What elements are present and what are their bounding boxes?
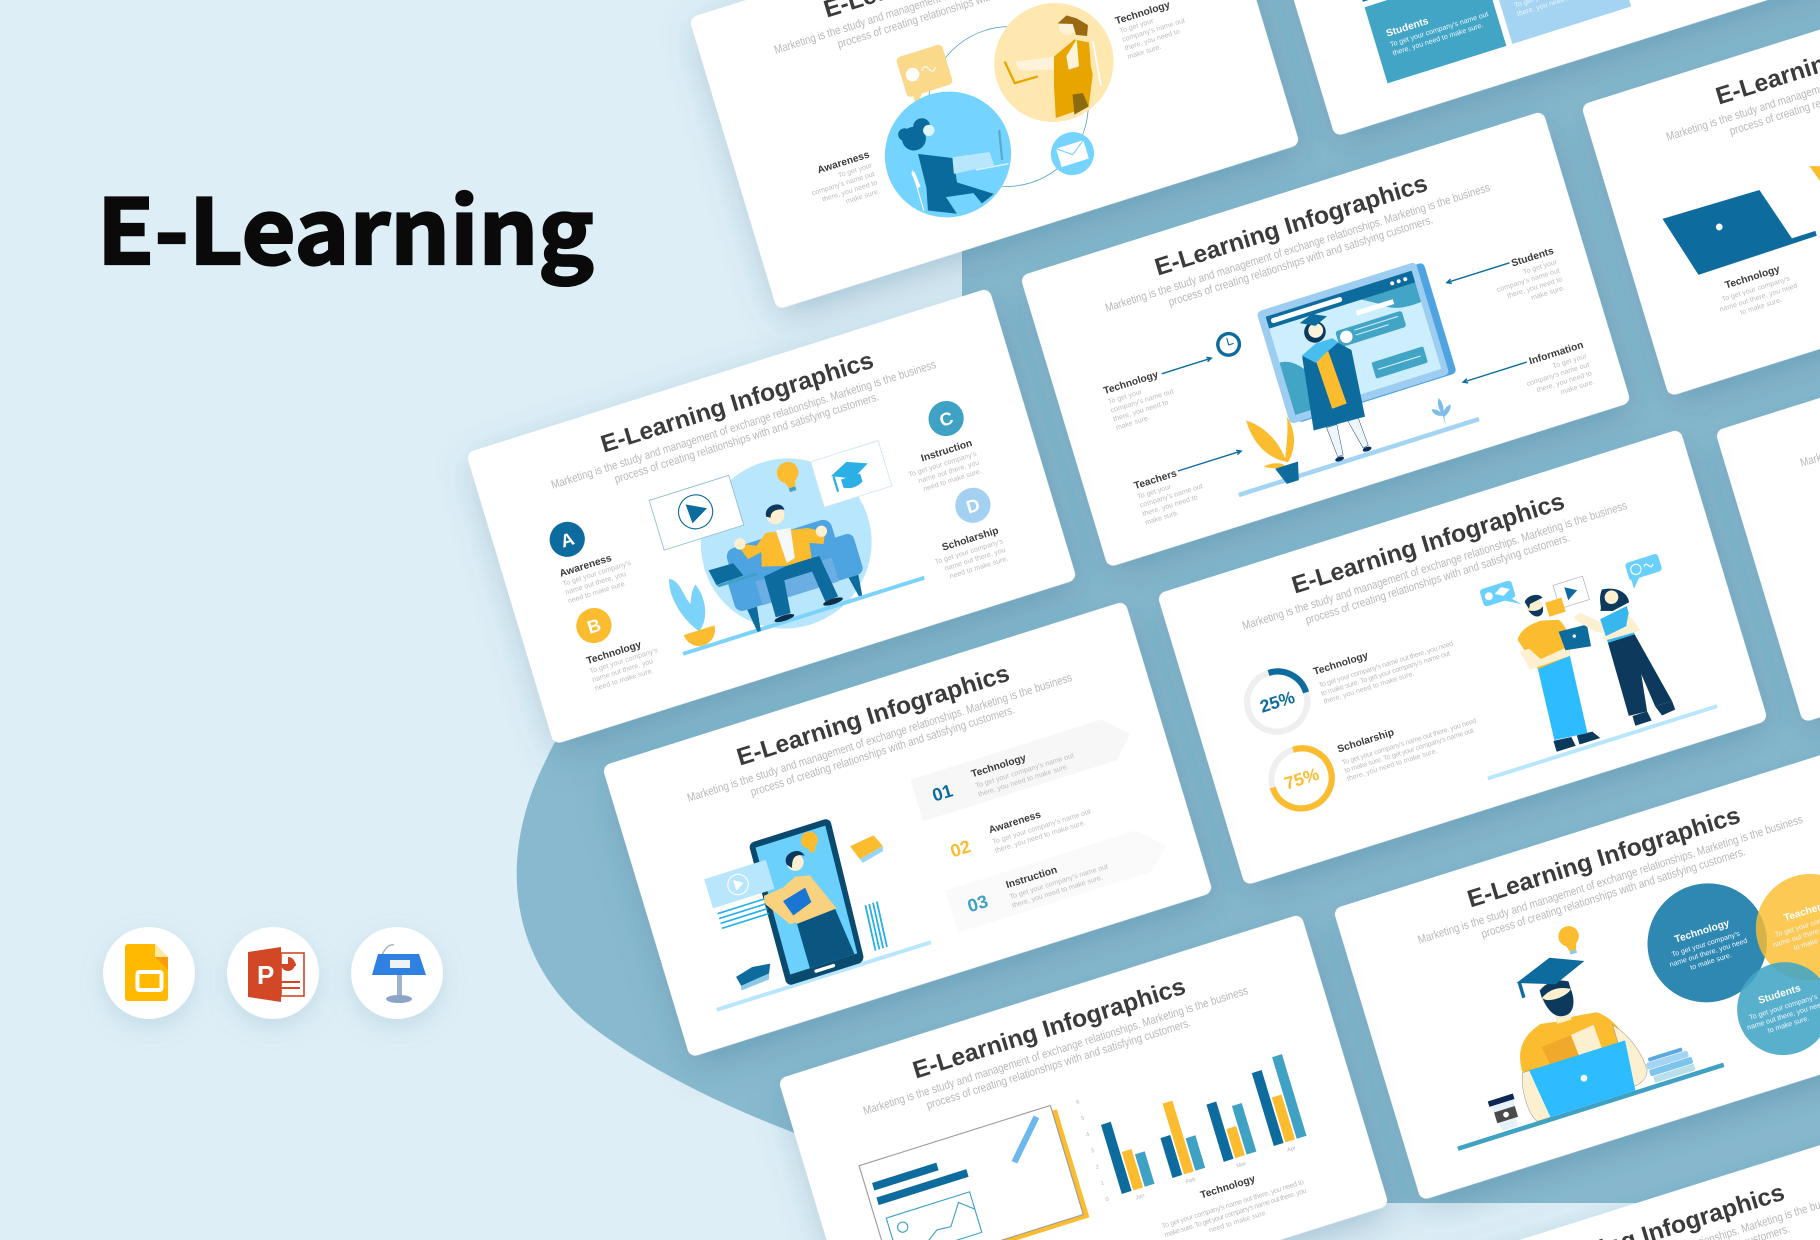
step 02: 02 — [948, 836, 973, 861]
graduate woman — [1281, 306, 1381, 466]
label: information — [1519, 340, 1596, 405]
video box — [649, 475, 744, 550]
axis labels: 3 — [1090, 1148, 1095, 1155]
slide subtitle: process of creating relationships with and satisfying customers. — [925, 1015, 1192, 1112]
video box — [1553, 576, 1589, 609]
label: students: company's name out — [1496, 267, 1561, 294]
label: technology: make sure. — [1115, 414, 1151, 432]
slide subtitle — [685, 670, 1078, 818]
step 01: Technology — [970, 753, 1028, 780]
label: technology: need to make sure. — [1208, 1208, 1268, 1234]
axis labels: Mar — [1236, 1161, 1247, 1170]
axis labels: Jan — [1135, 1193, 1145, 1202]
badge A: awareness: A — [558, 529, 577, 552]
arrow panel 1 — [910, 712, 1137, 821]
badge A: awareness: need to make sure. — [567, 579, 627, 605]
label: students: there, you need to — [1506, 275, 1563, 300]
donut: 25%: 25% — [1257, 687, 1297, 717]
technology text: name out there, you need — [1669, 937, 1748, 969]
bars: january — [1101, 1115, 1155, 1194]
label: scholarship — [1336, 702, 1482, 783]
label: technology: company's name out — [1121, 16, 1186, 44]
slide: study — [1333, 744, 1820, 1201]
label: teachers: company's name out — [1139, 482, 1204, 510]
students text: To get your company's — [1748, 993, 1819, 1022]
man with beard — [1505, 588, 1600, 754]
students text: Students — [1757, 983, 1802, 1007]
arrow: students — [1446, 261, 1510, 285]
bars: february — [1151, 1097, 1205, 1178]
students text — [1739, 977, 1820, 1041]
label: technology — [1712, 260, 1801, 322]
slide subtitle: process of creating relationships with and satisfying customers. — [613, 389, 880, 486]
background blob — [517, 0, 1820, 1203]
label: students: To get your — [1522, 258, 1559, 276]
slide subtitle — [1103, 180, 1496, 328]
badge C: instruction: name out there, you — [917, 458, 980, 485]
label: scholarship: to make sure. To get your company's name out — [1344, 727, 1474, 775]
axis labels: Apr — [1286, 1145, 1297, 1154]
video card — [704, 860, 775, 908]
label: awareness: there, you need to — [821, 179, 878, 204]
step 01: there, you need to make sure. — [977, 762, 1070, 799]
label: teachers: make sure. — [1144, 509, 1180, 527]
slide: bottom right — [1377, 1120, 1820, 1240]
icon: clock — [1215, 331, 1242, 358]
label: awareness: To get your — [837, 161, 874, 180]
step 01 — [929, 739, 1077, 812]
slide: far right — [1715, 266, 1820, 723]
students block — [1365, 0, 1506, 83]
slide subtitle: process of creating relationships with and satisfying customers. — [1167, 212, 1434, 309]
icon: bulb — [799, 829, 821, 855]
text lines — [717, 898, 769, 929]
label: scholarship: Scholarship — [1336, 727, 1395, 755]
label: technology: To get your — [1107, 388, 1144, 406]
label: students: make sure. — [1530, 284, 1566, 302]
arrow panel 3 — [945, 823, 1173, 933]
technology text: Technology — [1673, 918, 1731, 946]
bar chart — [1076, 1037, 1310, 1210]
badge C: instruction: C — [937, 408, 956, 431]
technology text: to make sure. — [1689, 951, 1733, 972]
badge B: technology: name out there, you — [591, 657, 654, 684]
label: technology: make sure. — [1126, 43, 1162, 61]
slide heading: E-Learning Infographics — [734, 660, 1013, 771]
badge B: technology: need to make sure. — [594, 667, 654, 693]
axis labels: 2 — [1095, 1164, 1100, 1171]
woman with long hair — [1568, 579, 1676, 734]
vertical lines — [862, 902, 890, 951]
badge D: scholarship: need to make sure. — [949, 555, 1009, 581]
arrow: teachers — [1177, 449, 1242, 473]
badge B: technology: B — [585, 615, 603, 638]
label: technology: make sure. To get your company's name out there, you — [1164, 1187, 1308, 1239]
label: students: Students — [1510, 246, 1556, 269]
tablet — [1559, 623, 1593, 654]
slide subtitle: Marketing is the study and management of exchange relationships. Marketing is the business — [1240, 498, 1629, 633]
step 03 — [964, 850, 1112, 923]
label: technology: Technology — [1199, 1174, 1257, 1201]
label: technology: there, you need to — [1112, 398, 1169, 423]
badge D: scholarship: D — [964, 495, 982, 518]
badge C: instruction: need to make sure. — [922, 467, 983, 493]
badge D: scholarship: To get your company's — [934, 537, 1004, 566]
bars: march — [1206, 1094, 1256, 1162]
step 03: there, you need to make sure. — [1011, 874, 1104, 910]
app icons — [103, 927, 443, 1019]
label: scholarship: To get your company's name out there, you need — [1341, 717, 1477, 767]
floor line — [1238, 417, 1480, 497]
label: information: company's name out — [1526, 361, 1590, 388]
label: technology — [1102, 367, 1180, 432]
axis labels — [1076, 1041, 1297, 1210]
label: awareness: Awareness — [816, 149, 871, 176]
blue book — [735, 961, 775, 991]
technology text — [1662, 914, 1751, 977]
axis labels: 1 — [1100, 1180, 1105, 1187]
slide: phone — [602, 601, 1213, 1058]
bars: april — [1249, 1054, 1307, 1146]
slide subtitle — [1460, 1189, 1820, 1240]
label: technology: to make sure. — [1739, 296, 1783, 317]
slide subtitle — [1240, 498, 1633, 646]
slide subtitle: process of creating relationships with and satisfying customers. — [749, 702, 1016, 799]
slide subtitle: process of creating relationships with and satisfying customers. — [1304, 530, 1571, 627]
step 02: Awareness — [988, 809, 1043, 836]
axis labels: 5 — [1081, 1116, 1085, 1122]
badge B: technology: To get your company's — [589, 646, 659, 675]
students block: Students — [1385, 16, 1430, 40]
arrow: technology — [1161, 356, 1212, 376]
plant in pot — [1246, 408, 1307, 490]
students block: To get your company's name out — [1389, 10, 1489, 49]
label: technology: To get your — [1119, 17, 1155, 35]
coffee cup — [1488, 1094, 1522, 1133]
envelope circle — [1046, 127, 1099, 181]
speech bubble: graduation — [1479, 579, 1522, 615]
label: awareness: company's name out — [811, 170, 876, 197]
slide: laptop — [1581, 0, 1820, 397]
slide subtitle — [772, 0, 1165, 70]
backdrop circle — [680, 437, 892, 650]
slide: chart — [778, 914, 1389, 1240]
teachers text — [1765, 895, 1820, 958]
icon: bulb — [1556, 924, 1584, 957]
label: information: there, you need to — [1536, 369, 1593, 394]
arrow: information — [1463, 360, 1528, 384]
sofa — [719, 512, 871, 636]
light block — [1489, 0, 1631, 44]
label: technology: Technology — [1114, 0, 1172, 27]
students block: there, you need to make sure. — [1392, 21, 1484, 57]
step 02: there, you need to make sure. — [994, 819, 1087, 855]
label: teachers: there, you need to — [1142, 493, 1199, 518]
seated man — [727, 492, 848, 629]
label: awareness — [805, 149, 882, 215]
floor line — [1487, 704, 1718, 780]
badge C: instruction — [891, 396, 983, 496]
floor line — [1457, 1063, 1724, 1151]
label: technology: To get your company's — [1721, 274, 1791, 304]
dark block — [1340, 0, 1482, 2]
slide heading: E-Learning Infographics — [1289, 488, 1568, 599]
yellow shape — [1809, 163, 1820, 183]
slide subtitle: Marketing is the study and management of exchange relationships. Marketing is the business — [549, 357, 938, 492]
slide heading: E-Learning Infographics — [1152, 170, 1431, 281]
label: information: To get your — [1552, 352, 1588, 370]
slide subtitle: Marketing is the study and management of exchange relationships. Marketing is the business — [861, 983, 1250, 1118]
label: technology — [1114, 0, 1191, 61]
step 02 — [947, 795, 1094, 868]
slide subtitle: Marketing is the study and management of exchange relationships. Marketing is the business — [685, 670, 1074, 805]
label: technology: Technology — [1312, 650, 1370, 678]
label: technology: To get your company's name out there, you need to — [1161, 1178, 1305, 1230]
students text: to make sure. — [1767, 1014, 1810, 1035]
label: students — [1490, 246, 1566, 311]
label: information: make sure. — [1560, 378, 1596, 396]
badge D: scholarship: name out there, you — [944, 546, 1007, 573]
icon: powerpoint: P — [257, 960, 274, 990]
axis labels: Feb — [1185, 1177, 1196, 1186]
slide heading: E-Learning Infographics — [910, 973, 1189, 1084]
label: scholarship: there, you need to make sure. — [1346, 747, 1439, 783]
blue circle with woman at laptop — [869, 75, 1027, 234]
browser window — [1256, 260, 1457, 425]
step 02: To get your company's name out — [991, 808, 1092, 846]
badge B: technology: Technology — [585, 639, 643, 667]
icon: powerpoint — [227, 927, 319, 1019]
slide subtitle: Marketing is the study and management of exchange relationships. Marketing is the business — [1103, 180, 1492, 315]
step 03: To get your company's name out — [1009, 862, 1109, 901]
potted plant — [667, 570, 719, 650]
badge A: awareness: To get your company's — [562, 559, 632, 588]
badge B: technology — [572, 592, 664, 693]
label: technology: company's name out — [1110, 387, 1174, 415]
slide: sofa — [466, 288, 1077, 745]
icon: keynote — [351, 927, 443, 1019]
slide heading: E-Learning Infographics — [1464, 802, 1743, 913]
pen — [1004, 1117, 1047, 1162]
phone — [744, 818, 872, 986]
student with cap — [1488, 939, 1652, 1123]
slide: colored blocks — [1247, 0, 1820, 137]
icon: bulb — [774, 459, 804, 494]
orange square — [1545, 598, 1566, 617]
axis labels: 0 — [1105, 1197, 1110, 1203]
laptop illustration — [1663, 176, 1817, 280]
slide subtitle: process of creating relationships with and satisfying customers. — [1479, 844, 1747, 941]
donut: 75% — [1264, 741, 1339, 816]
badge D: scholarship — [918, 483, 1010, 584]
slide heading: E-Learning Infographics — [598, 347, 877, 458]
yellow book — [849, 834, 886, 865]
step 01: To get your company's name out — [975, 751, 1075, 790]
badge C: instruction: Instruction — [920, 438, 974, 464]
small sprout — [1429, 395, 1456, 428]
label: technology: there, you need to — [1124, 28, 1181, 52]
laptop — [1529, 1040, 1640, 1119]
donut: 25% — [1240, 664, 1315, 739]
slide: women and circles — [689, 0, 1300, 310]
label: technology: To get your company's name out there, you need — [1318, 640, 1454, 690]
slide subtitle — [861, 983, 1254, 1131]
yellow circle with woman at laptop — [980, 0, 1128, 137]
label: awareness: make sure. — [845, 187, 881, 206]
step 01: 01 — [930, 780, 955, 806]
label: teachers: To get your — [1136, 482, 1173, 501]
label: teachers: Teachers — [1133, 468, 1179, 492]
badge A: awareness — [545, 506, 637, 605]
books — [1644, 1045, 1696, 1084]
badge D: scholarship: Scholarship — [941, 525, 1000, 554]
slide: percentages — [1157, 429, 1768, 886]
slide: graduate — [1020, 111, 1631, 568]
man with book — [752, 843, 855, 976]
speech bubble: headset — [1625, 553, 1665, 589]
axis labels: 4 — [1085, 1132, 1090, 1138]
connecting ring — [908, 6, 1108, 207]
label: technology: there, you need to make sure. — [1323, 670, 1415, 706]
label: teachers — [1133, 462, 1209, 527]
step 03: Instruction — [1005, 865, 1059, 891]
icon: google slides — [103, 927, 195, 1019]
axis labels: 6 — [1076, 1099, 1080, 1106]
floor line — [716, 940, 931, 1012]
label: technology: Technology — [1102, 369, 1160, 397]
label: technology: Technology — [1724, 264, 1781, 292]
technology text: To get your company's — [1671, 930, 1741, 959]
graduation cap box — [811, 441, 892, 507]
speech bubble — [896, 44, 957, 109]
venn diagram — [1633, 839, 1820, 1087]
label: technology — [1155, 1160, 1310, 1240]
badge A: awareness: name out there, you — [564, 570, 627, 597]
badge A: awareness: Awareness — [558, 553, 613, 580]
label: technology — [1312, 625, 1459, 706]
label: technology: name out there, you need — [1719, 282, 1798, 314]
card with document — [859, 1104, 1089, 1240]
floor line — [682, 576, 925, 656]
badge C: instruction: To get your company's — [907, 450, 978, 479]
laptop — [709, 557, 758, 589]
step 03: 03 — [965, 891, 990, 916]
slide subtitle — [549, 357, 942, 505]
label: technology: to make sure. To get your company's name out — [1320, 649, 1451, 698]
main title: E-Learning — [97, 160, 594, 290]
label: information: Information — [1528, 340, 1585, 367]
donut: 75%: 75% — [1282, 764, 1322, 794]
